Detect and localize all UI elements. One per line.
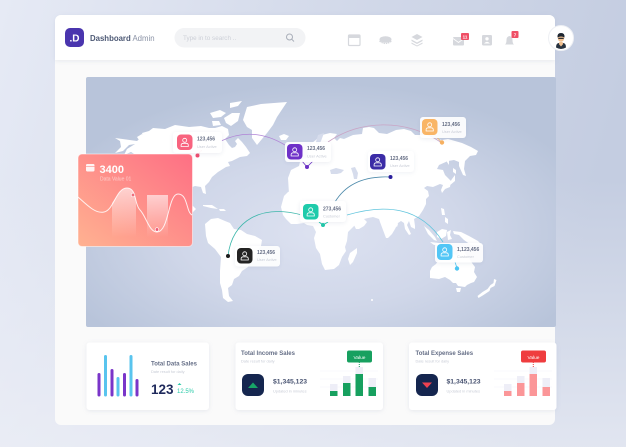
label: orange user: [420, 117, 466, 138]
bar chart: [320, 362, 378, 396]
Alaska islands: [137, 134, 144, 140]
tooltip: Value: [528, 355, 540, 361]
label: teal customer: 273,456: [323, 206, 341, 212]
Cuba: [203, 205, 218, 209]
bar chart: [99, 356, 137, 395]
Madagascar: [348, 248, 357, 265]
world map: [115, 101, 496, 302]
icon: up: [242, 374, 264, 396]
Greenland: [243, 102, 287, 145]
route arcs: [221, 125, 443, 256]
label: indigo user: User Active: [390, 163, 410, 168]
map panel: [86, 77, 556, 327]
note: Updated in minutes: [273, 388, 307, 394]
icon: contact card: [482, 35, 492, 46]
New Guinea: [453, 231, 483, 246]
marker: pink: [196, 150, 202, 158]
label: blue customer: [435, 243, 483, 262]
Eurasia: [288, 127, 478, 238]
label: blue customer: 1,123,456: [457, 247, 479, 253]
icon: bell with badge: 7: [514, 32, 517, 38]
tooltip: Value: [354, 355, 366, 361]
panel: income: [236, 342, 383, 410]
panel: total data sales: [86, 342, 209, 410]
Arctic islands: [210, 101, 242, 126]
heading: Total Data Sales: [151, 362, 198, 368]
label: pink user: User Active: [197, 144, 217, 149]
Black Sea: [330, 168, 344, 174]
label: black user: User Active: [257, 257, 277, 262]
amount: $1,345,123: [446, 378, 481, 386]
label: indigo user: 123,456: [390, 156, 408, 162]
subtext: Date result for daily: [241, 358, 275, 364]
icon: bell with badge: [505, 31, 518, 44]
panel: expense: [409, 342, 556, 410]
subtext: Date result for daily: [151, 369, 185, 374]
label: teal customer: [300, 201, 346, 222]
label: purple user: [285, 142, 331, 162]
label: pink user: [173, 132, 222, 153]
marker: orange: [437, 138, 444, 145]
value: 123: [151, 382, 174, 397]
marker: purple: [302, 161, 313, 169]
Sri Lanka, Sumatra, Borneo, Java: [395, 222, 452, 245]
icon: avatar: [548, 26, 574, 50]
bar chart: [494, 362, 552, 396]
card: data value: [78, 154, 192, 246]
label: teal customer: Customer: [323, 214, 341, 218]
marker: teal: [319, 222, 328, 227]
header bar: [55, 15, 574, 60]
label: orange user: User Active: [442, 129, 462, 134]
Iceland: [279, 134, 289, 140]
South America: [205, 218, 262, 302]
label: purple user: 123,456: [307, 146, 325, 152]
Australia: [430, 249, 477, 287]
marker: blue: [455, 262, 459, 271]
heading: Total Expense Sales: [416, 351, 474, 357]
North America: [115, 125, 250, 215]
Caspian Sea: [351, 167, 358, 179]
Japan and Sakhalin: [443, 155, 456, 190]
note: Updated in minutes: [446, 388, 480, 394]
label: pink user: 123,456: [197, 136, 215, 142]
label: black user: 123,456: [257, 250, 275, 256]
search box: Type in to search ..: [183, 35, 236, 42]
label: orange user: 123,456: [442, 122, 460, 128]
label: indigo user: [368, 151, 414, 172]
subtext: Date result for daily: [416, 358, 449, 364]
tooltip: [521, 350, 546, 362]
trend: 12.5%: [177, 389, 195, 395]
tooltip: [347, 350, 372, 362]
dashboard panel: [55, 15, 574, 425]
logo: .D: [70, 34, 80, 44]
Baltic Sea: [316, 133, 324, 146]
heading: Total Income Sales: [241, 351, 296, 357]
marker: indigo: [388, 175, 392, 179]
caption: Data Value 01: [100, 176, 132, 182]
small island: [371, 299, 373, 301]
icon: down: [416, 374, 438, 396]
label: blue customer: Customer: [457, 254, 475, 259]
logo: [65, 28, 84, 47]
Britain: [293, 149, 300, 160]
icon: window: [348, 35, 360, 46]
Philippines: [441, 208, 448, 224]
icon: database: [380, 36, 392, 44]
Africa: [281, 188, 360, 270]
marker: black: [226, 254, 230, 258]
amount: $1,345,123: [273, 378, 307, 386]
value: 3400: [100, 164, 124, 176]
icon: mail with badge: 11: [463, 34, 468, 39]
label: purple user: User Active: [307, 154, 327, 158]
New Zealand: [478, 279, 496, 298]
icon: card box: [86, 164, 94, 172]
label: black user: [235, 246, 280, 266]
search box: [174, 28, 306, 48]
Tasmania: [456, 288, 461, 292]
icon: layers: [412, 34, 422, 46]
line chart: [78, 188, 192, 237]
icon: mail with badge: [453, 33, 469, 46]
dashboard title: Dashboard Admin: [90, 34, 155, 43]
